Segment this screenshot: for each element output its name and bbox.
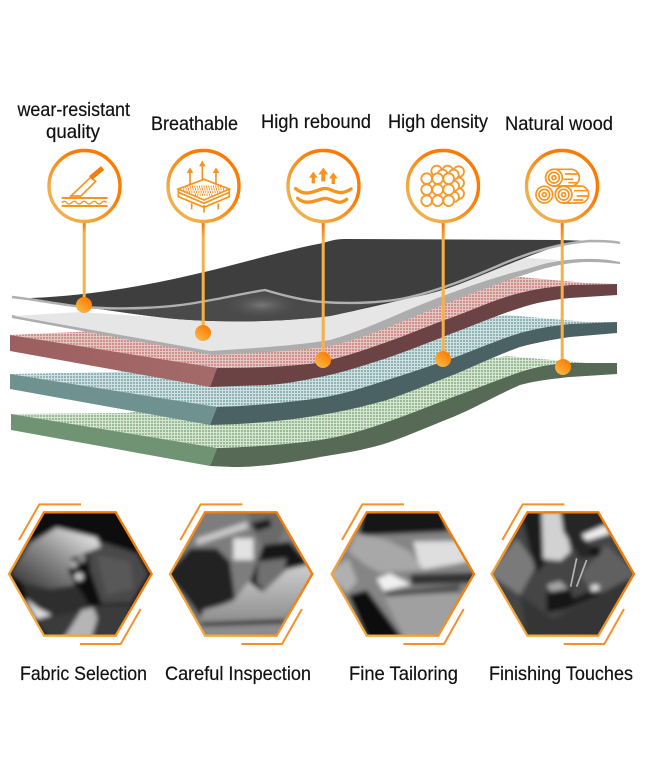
heading: wear-resistant quality <box>17 99 131 143</box>
icon ring <box>49 150 120 222</box>
heading: Breathable: Breathable <box>151 113 238 135</box>
heading: Natural wood: Natural wood <box>505 113 613 135</box>
icon: rebound waves and arrows <box>296 168 351 202</box>
caption: Fabric Selection: Fabric Selection <box>20 663 147 685</box>
layer: white sheet <box>12 258 620 355</box>
pointer stem <box>202 222 205 332</box>
pointer dot <box>435 351 451 367</box>
layer stack illustration <box>10 239 620 467</box>
icon: blade on layered material <box>62 168 108 206</box>
caption: Fine Tailoring: Fine Tailoring <box>349 663 458 685</box>
process step: careful inspection <box>163 503 320 685</box>
pointer dot <box>315 352 331 368</box>
heading: High density: High density <box>388 111 488 133</box>
icon ring <box>408 150 478 222</box>
pointer dot <box>195 325 211 341</box>
icon: breathable layers with arrows <box>178 160 229 213</box>
photo: sewing machine stitching leather <box>485 503 642 645</box>
photo: hand cutting with shears <box>325 503 482 645</box>
pointer stem <box>442 222 445 358</box>
pointer stem <box>561 222 564 366</box>
process step: fine tailoring <box>325 503 482 685</box>
callout: wear-resistant quality <box>17 99 131 313</box>
icon: stacked logs <box>536 169 589 203</box>
callout: high rebound <box>261 111 371 368</box>
heading: wear-resistant quality: quality <box>46 121 100 143</box>
photo: hands selecting leather <box>0 503 160 645</box>
icon ring <box>168 150 239 222</box>
pointer dot <box>555 359 571 375</box>
heading: High rebound: High rebound <box>261 111 371 133</box>
layer: dark top sheet <box>12 239 620 321</box>
heading: wear-resistant quality: wear-resistant <box>17 99 131 121</box>
process step: finishing touches <box>485 503 642 685</box>
icon ring <box>526 150 598 222</box>
process step: fabric selection <box>8 503 153 680</box>
pointer stem <box>83 222 86 304</box>
icon ring <box>288 150 359 222</box>
pointer stem <box>322 222 325 359</box>
photo: worker inspecting leather <box>163 503 320 645</box>
caption: Finishing Touches: Finishing Touches <box>489 663 633 685</box>
layer: green base <box>11 356 617 467</box>
layer: teal <box>10 315 617 425</box>
caption: Careful Inspection: Careful Inspection <box>165 663 311 685</box>
icon: packed circles <box>421 166 464 206</box>
callout: natural wood <box>505 113 613 375</box>
layer: red <box>10 277 617 387</box>
callout: high density <box>388 111 488 367</box>
callout: breathable <box>151 113 239 341</box>
pointer dot <box>76 297 92 313</box>
